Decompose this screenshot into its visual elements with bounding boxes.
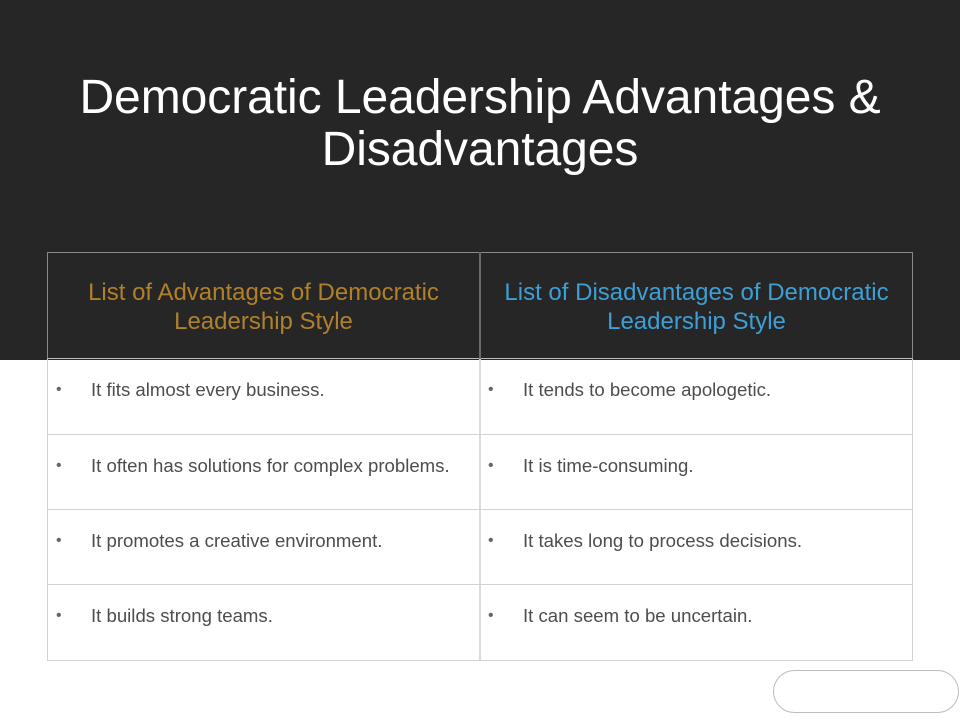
table column divider, header part <box>479 252 481 359</box>
disadvantage item 4: • <box>488 607 494 624</box>
disadvantage item 1: • <box>488 381 494 398</box>
heading: disadvantages: Leadership Style <box>607 308 786 335</box>
advantage item 1: • <box>56 381 62 398</box>
heading: advantages: List of Advantages of Democratic <box>88 279 439 306</box>
disadvantage item 1: It tends to become apologetic. <box>523 379 771 400</box>
disadvantage item 3: • <box>488 532 494 549</box>
title <box>79 71 881 176</box>
table body border lines <box>47 359 913 661</box>
disadvantage item 2: • <box>488 457 494 474</box>
heading: advantages <box>88 279 439 335</box>
advantage item 2: It often has solutions for complex problems. <box>91 455 450 476</box>
table header border lines <box>47 252 913 359</box>
table <box>47 252 913 661</box>
disadvantage item 3: It takes long to process decisions. <box>523 530 802 551</box>
advantage item 4: • <box>56 607 62 624</box>
heading: disadvantages <box>504 279 889 335</box>
advantage item 3: • <box>56 532 62 549</box>
empty rounded button outline <box>773 670 959 713</box>
advantage item 1: It fits almost every business. <box>91 379 325 400</box>
disadvantage item 2: It is time-consuming. <box>523 455 694 476</box>
disadvantage item 4: It can seem to be uncertain. <box>523 605 752 626</box>
advantage item 2: • <box>56 457 62 474</box>
table column divider, body part <box>479 359 481 660</box>
advantage item 3: It promotes a creative environment. <box>91 530 382 551</box>
dark header band <box>0 0 960 360</box>
advantage item 4: It builds strong teams. <box>91 605 273 626</box>
heading: disadvantages: List of Disadvantages of Democratic <box>504 279 889 306</box>
title: Disadvantages <box>322 123 638 176</box>
title: Democratic Leadership Advantages & <box>79 71 881 124</box>
heading: advantages: Leadership Style <box>174 308 353 335</box>
